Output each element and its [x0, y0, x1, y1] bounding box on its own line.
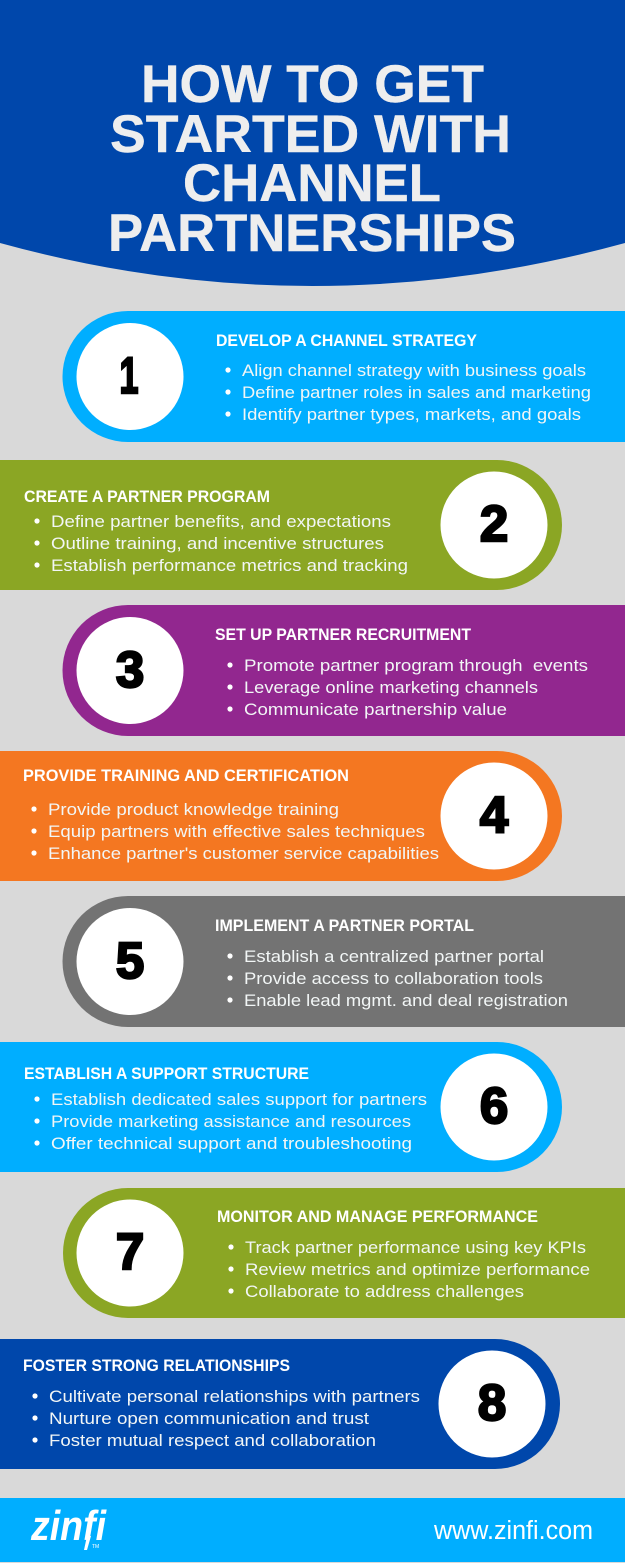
panel: step 2 create a partner program — [0, 460, 562, 590]
bullets: step 2: Define partner benefits, and expectations — [51, 513, 391, 531]
bullets: step 4: Provide product knowledge training — [48, 801, 339, 819]
title: PARTNERSHIPS — [108, 204, 516, 263]
bullets: step 3 — [227, 657, 588, 719]
number 4: 4 — [480, 786, 509, 843]
heading: step 8: FOSTER STRONG RELATIONSHIPS — [23, 1357, 290, 1375]
heading: step 3: SET UP PARTNER RECRUITMENT — [215, 626, 471, 644]
bullets: step 6: Provide marketing assistance and resources — [51, 1113, 411, 1131]
panel: step 3 set up partner recruitment — [62, 605, 625, 736]
logo: zinfi: TM — [92, 1544, 99, 1550]
heading: step 5: IMPLEMENT A PARTNER PORTAL — [215, 917, 474, 935]
bullets: step 2: Establish performance metrics and tracking — [51, 557, 408, 575]
bullets: step 6: Offer technical support and troubleshooting — [51, 1135, 412, 1153]
heading: step 1: DEVELOP A CHANNEL STRATEGY — [216, 332, 477, 350]
number 8: 8 — [478, 1374, 506, 1431]
bullets: step 8: Foster mutual respect and collaboration — [49, 1432, 376, 1450]
website url: www.zinfi.com — [433, 1517, 593, 1545]
bullets: step 5: Enable lead mgmt. and deal registration — [244, 992, 568, 1010]
number 6: 6 — [480, 1077, 508, 1134]
title — [108, 55, 516, 263]
panel: step 5 implement a partner portal — [62, 896, 625, 1027]
number 5: 5 — [116, 932, 144, 989]
bullets: step 6 — [34, 1091, 427, 1153]
title: HOW TO GET — [141, 55, 484, 114]
bullets: step 8 — [32, 1388, 420, 1450]
panel: step 8 foster strong relationships — [0, 1339, 560, 1469]
panel: step 4 provide training and certification — [0, 751, 562, 881]
bullets: step 3: Promote partner program through events — [244, 657, 588, 675]
panel: step 7 monitor and manage performance — [63, 1188, 625, 1318]
bullets: step 3: Communicate partnership value — [244, 701, 507, 719]
footer bar — [0, 1498, 625, 1562]
bullets: step 7: Track partner performance using key KPIs — [245, 1239, 586, 1257]
panel: step 1 develop a channel strategy — [62, 311, 625, 442]
title: CHANNEL — [183, 154, 441, 213]
header banner — [0, 0, 625, 286]
number 3: 3 — [116, 641, 144, 698]
bullets: step 1: Define partner roles in sales and marketing — [242, 384, 591, 402]
bullets: step 8: Nurture open communication and trust — [49, 1410, 369, 1428]
bullets: step 4: Enhance partner's customer service capabilities — [48, 845, 439, 863]
number 7: 7 — [116, 1223, 144, 1280]
bullets: step 4: Equip partners with effective sales techniques — [48, 823, 425, 841]
bullets: step 2: Outline training, and incentive structures — [51, 535, 384, 553]
bullets: step 1: Align channel strategy with business goals — [242, 362, 586, 380]
bullets: step 5 — [227, 948, 568, 1010]
logo: zinfi: zinfi — [30, 1502, 107, 1549]
bullets: step 4 — [31, 801, 439, 863]
bullets: step 5: Provide access to collaboration tools — [244, 970, 543, 988]
heading: step 7: MONITOR AND MANAGE PERFORMANCE — [217, 1208, 538, 1226]
number 1: 1 — [120, 347, 138, 404]
bullets: step 1: Identify partner types, markets, and goals — [242, 406, 581, 424]
title: STARTED WITH — [110, 105, 511, 164]
bullets: step 5: Establish a centralized partner portal — [244, 948, 544, 966]
bullets: step 1 — [225, 362, 591, 424]
panel: step 6 establish a support structure — [0, 1042, 562, 1172]
bullets: step 2 — [34, 513, 408, 575]
heading: step 2: CREATE A PARTNER PROGRAM — [24, 488, 270, 506]
heading: step 6: ESTABLISH A SUPPORT STRUCTURE — [24, 1065, 309, 1083]
bullets: step 7 — [228, 1239, 590, 1301]
bullets: step 6: Establish dedicated sales support for partners — [51, 1091, 427, 1109]
bullets: step 7: Collaborate to address challenges — [245, 1283, 524, 1301]
bullets: step 7: Review metrics and optimize performance — [245, 1261, 590, 1279]
number 2: 2 — [480, 495, 508, 552]
bullets: step 3: Leverage online marketing channels — [244, 679, 538, 697]
heading: step 4: PROVIDE TRAINING AND CERTIFICATION — [23, 767, 349, 785]
bullets: step 8: Cultivate personal relationships with partners — [49, 1388, 420, 1406]
